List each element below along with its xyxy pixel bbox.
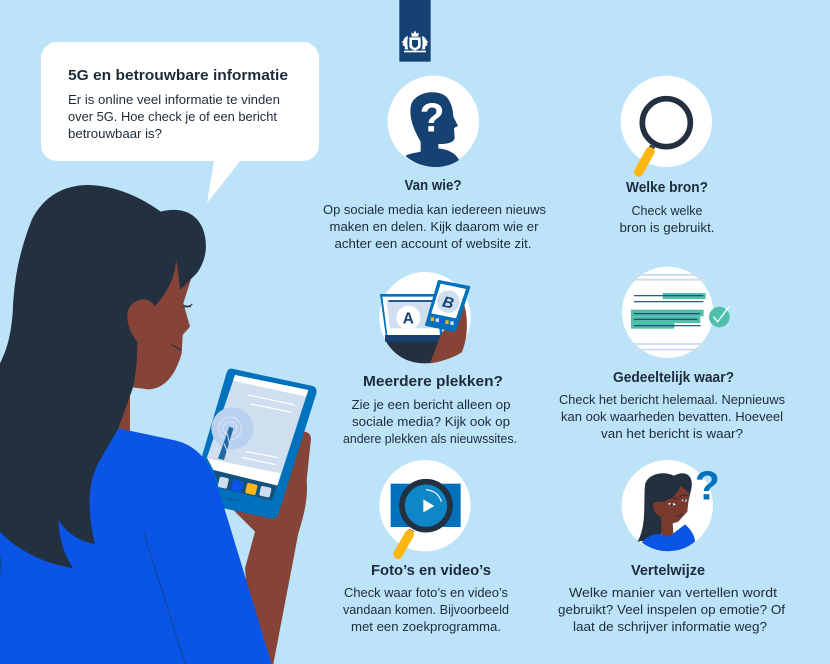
body text xyxy=(343,585,509,634)
body text: kan ook waarheden bevatten. Hoeveel xyxy=(561,409,783,424)
bubble text xyxy=(68,92,280,141)
icon: magnifying glass xyxy=(621,76,712,172)
panel: welke bron xyxy=(620,76,714,235)
phone xyxy=(202,369,317,518)
body text xyxy=(323,202,546,251)
body text: Zie je een bericht alleen op xyxy=(352,397,510,412)
icon: laptop and phone: B xyxy=(441,294,455,313)
icon: thinking woman with question mark xyxy=(622,460,720,551)
icon: video with magnifier xyxy=(379,460,471,554)
icon: head with question mark xyxy=(388,76,479,167)
body text: van het bericht is waar? xyxy=(601,426,743,441)
body text: Check het bericht helemaal. Nepnieuws xyxy=(559,392,785,407)
body text: achter een account of website zit. xyxy=(334,236,532,251)
body text: maken en delen. Kijk daarom wie er xyxy=(330,219,539,234)
neck and face xyxy=(113,260,191,433)
body text: laat de schrijver informatie weg? xyxy=(573,619,767,634)
body text: Check waar foto’s en video’s xyxy=(344,585,508,600)
bubble text: over 5G. Hoe check je of een bericht xyxy=(68,109,277,124)
heading: Welke bron? xyxy=(626,180,708,196)
illustration: woman with phone xyxy=(0,185,317,664)
heading: Gedeeltelijk waar? xyxy=(613,370,734,386)
bubble text: betrouwbaar is? xyxy=(68,126,162,141)
bubble text: Er is online veel informatie te vinden xyxy=(68,92,280,107)
body text: Check welke xyxy=(632,203,702,218)
top xyxy=(0,428,272,664)
body text: Welke manier van vertellen wordt xyxy=(569,585,777,600)
icon: thinking woman with question mark: ? xyxy=(695,463,720,509)
body text: gebruikt? Veel inspelen op emotie? Of xyxy=(558,602,785,617)
panel: vertelwijze xyxy=(558,460,785,634)
speech bubble xyxy=(41,42,319,203)
eye and mouth xyxy=(172,304,192,350)
panel: foto's en video's xyxy=(343,460,509,634)
bubble title: 5G en betrouwbare informatie xyxy=(68,67,288,84)
body text xyxy=(558,585,785,634)
panel: meerdere plekken xyxy=(343,272,517,446)
logo: Rijksoverheid crest on navy ribbon xyxy=(399,0,431,62)
body text: sociale media? Kijk ook op xyxy=(352,414,510,429)
body text: andere plekken als nieuwssites. xyxy=(343,431,517,446)
body text xyxy=(343,397,517,446)
body text: Op sociale media kan iedereen nieuws xyxy=(323,202,546,217)
body text xyxy=(559,392,785,441)
icon: text lines with check xyxy=(622,267,730,358)
body text: vandaan komen. Bijvoorbeeld xyxy=(343,602,509,617)
heading: Vertelwijze xyxy=(631,563,705,579)
heading: Meerdere plekken? xyxy=(363,374,503,390)
body text: bron is gebruikt. xyxy=(620,220,714,235)
panel: gedeeltelijk waar xyxy=(559,267,785,441)
heading: Van wie? xyxy=(404,178,462,194)
icon: laptop and phone xyxy=(379,272,471,363)
hair xyxy=(0,185,206,568)
panel: van wie xyxy=(323,76,546,251)
icon: laptop and phone: A xyxy=(403,310,414,327)
body text: met een zoekprogramma. xyxy=(351,619,501,634)
body text xyxy=(620,203,714,235)
icon: head with question mark: ? xyxy=(420,95,444,141)
arm and hand xyxy=(233,432,311,664)
heading: Foto’s en video’s xyxy=(371,563,491,579)
